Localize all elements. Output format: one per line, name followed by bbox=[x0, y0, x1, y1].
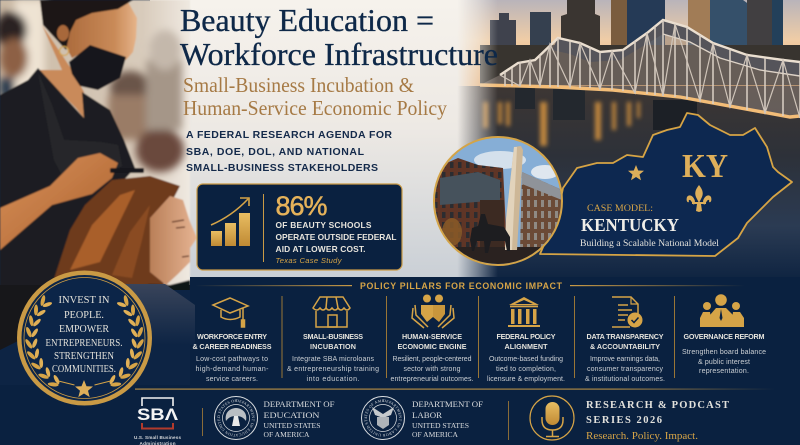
pillar text: licensure & employment. bbox=[487, 376, 565, 383]
seal: Department of Education: DEPARTMENT OF EDUCATION UNITED STATES OF AMERICA bbox=[217, 399, 255, 437]
title bbox=[180, 2, 498, 72]
pillar dividers bbox=[282, 296, 675, 378]
pillar text: ALIGNMENT bbox=[504, 342, 548, 351]
federal research agenda text: SMALL-BUSINESS STAKEHOLDERS bbox=[186, 162, 378, 174]
text: Department of Labor: UNITED STATES bbox=[412, 422, 469, 430]
stat description: AID AT LOWER COST. bbox=[276, 244, 366, 254]
pillar text: consumer transparency bbox=[587, 366, 664, 373]
pillar text: representation. bbox=[699, 368, 749, 375]
federal research agenda text: SBA, DOE, DOL, AND NATIONAL bbox=[186, 146, 365, 158]
text: Department of Education bbox=[264, 400, 335, 439]
gold water reflections bbox=[483, 102, 640, 146]
text: Department of Labor: DEPARTMENT OF bbox=[412, 400, 484, 409]
pillar text: service careers. bbox=[206, 376, 258, 383]
pillar text bbox=[585, 332, 665, 383]
pillar text: Outcome-based funding bbox=[489, 356, 563, 363]
federal research agenda text bbox=[186, 129, 392, 174]
cape fade into panel bbox=[125, 284, 195, 345]
stylist face bbox=[62, 2, 137, 60]
stylist ear and earring bbox=[57, 25, 69, 41]
pillar: data transparency bbox=[585, 297, 665, 383]
pillar text: Strengthen board balance bbox=[682, 349, 766, 356]
icon: rising bar chart with arrow bbox=[211, 198, 250, 246]
photo: city skyline and bridge over river bbox=[440, 0, 800, 286]
pillar text: & CAREER READINESS bbox=[192, 342, 272, 351]
pillar text: Improve earnings data, bbox=[590, 356, 660, 363]
text: Department of Education: DEPARTMENT OF bbox=[264, 400, 335, 409]
client face bbox=[150, 196, 197, 285]
pillar text: INCUBATION bbox=[310, 342, 356, 351]
bottom navy panel bbox=[0, 277, 800, 445]
divider after SBA bbox=[202, 408, 203, 436]
comb bbox=[110, 168, 144, 173]
text: Department of Education: UNITED STATES bbox=[264, 422, 321, 430]
pillar text: Resilient, people-centered bbox=[392, 356, 472, 363]
icon: storefront bbox=[313, 297, 350, 327]
sky bbox=[440, 0, 800, 90]
seal text: STRENGTHEN bbox=[54, 351, 114, 362]
stylist arm and hand bbox=[0, 153, 118, 250]
pillar: small-business incubation bbox=[287, 297, 379, 383]
pillar text bbox=[487, 332, 565, 383]
river water bbox=[460, 86, 800, 272]
pillar text bbox=[682, 332, 766, 375]
seal: Department of Education bbox=[214, 396, 258, 440]
text: Department of Education: EDUCATION bbox=[264, 411, 320, 420]
seal star bbox=[75, 380, 93, 397]
icon: star bbox=[628, 165, 644, 180]
circular photo: Louisville building with bat and horse statue bbox=[434, 137, 565, 267]
text: research and podcast series: RESEARCH & PODCAST bbox=[586, 400, 729, 411]
pillar text: high-demand human- bbox=[196, 366, 269, 373]
client cape bbox=[148, 279, 190, 290]
stat description: OF BEAUTY SCHOOLS bbox=[276, 220, 372, 230]
pillar text: into education. bbox=[306, 376, 360, 383]
logo: SBA bbox=[134, 398, 181, 445]
KY letters: KY bbox=[682, 148, 728, 185]
divider before podcast bbox=[508, 401, 509, 440]
client facial features bbox=[172, 220, 189, 257]
pillar text: GOVERNANCE REFORM bbox=[684, 332, 764, 341]
icon: fleur-de-lis bbox=[687, 185, 711, 212]
pillar text: & ACCOUNTABILITY bbox=[590, 342, 660, 351]
pillar text: & public interest bbox=[698, 359, 750, 366]
pillar text: entrepreneurial outcomes. bbox=[390, 376, 474, 383]
seal text bbox=[46, 295, 122, 375]
seal text: COMMUNITIES. bbox=[52, 364, 116, 375]
pillar text: HUMAN-SERVICE bbox=[402, 332, 462, 341]
face mask bbox=[69, 45, 126, 90]
seal text: EMPOWER bbox=[59, 324, 109, 335]
seal text: PEOPLE. bbox=[64, 310, 104, 321]
pillar text: tied to completion, bbox=[496, 366, 556, 373]
seal text: ENTREPRENEURS. bbox=[46, 338, 122, 349]
text: Department of Education: OF AMERICA bbox=[264, 431, 310, 439]
text: research and podcast series bbox=[586, 400, 729, 442]
stylist black shirt and apron bbox=[0, 68, 135, 290]
stat number: 86% bbox=[276, 191, 328, 221]
heading: policy pillars: POLICY PILLARS FOR ECONOMIC IMPACT bbox=[360, 281, 563, 291]
Kentucky name: KENTUCKY bbox=[581, 215, 679, 235]
pillar: federal policy alignment bbox=[487, 297, 565, 383]
pillar text: ECONOMIC ENGINE bbox=[398, 342, 467, 351]
pillar text bbox=[287, 332, 379, 383]
icon: people in cupped hands bbox=[412, 294, 454, 328]
case model label: CASE MODEL: bbox=[587, 204, 653, 214]
stylist neck and skin bbox=[38, 25, 84, 118]
photo: salon stylist and client bbox=[0, 0, 197, 300]
pillar text: Low-cost pathways to bbox=[196, 356, 268, 363]
text: Department of Labor: OF AMERICA bbox=[412, 431, 458, 439]
pillar text: SMALL-BUSINESS bbox=[303, 332, 363, 341]
text: research and podcast series: Research. Policy. Impact. bbox=[586, 431, 698, 442]
logo: SBA: SBΛ bbox=[137, 406, 178, 424]
title: Workforce Infrastructure bbox=[180, 36, 498, 72]
pillar: governance reform bbox=[682, 294, 766, 375]
subtitle: Human-Service Economic Policy bbox=[183, 96, 447, 120]
text: Department of Labor: LABOR bbox=[412, 411, 443, 420]
seal: invest in people bbox=[17, 270, 152, 406]
subtitle: Small-Business Incubation & bbox=[183, 73, 414, 97]
icon: three leaders bbox=[700, 294, 744, 327]
pillar: workforce entry bbox=[192, 298, 272, 383]
pillar: human-service economic engine bbox=[390, 294, 474, 383]
blurred background people bbox=[0, 0, 184, 172]
case model tagline: Building a Scalable National Model bbox=[580, 238, 720, 248]
icon: document with check bbox=[612, 297, 642, 328]
seal: Department of Labor: DEPARTMENT OF LABOR UNITED STATES OF AMERICA bbox=[364, 399, 402, 436]
Kentucky state shape bbox=[540, 113, 792, 256]
subtitle bbox=[183, 73, 447, 120]
seal: Department of Labor bbox=[361, 396, 405, 440]
text: research and podcast series: SERIES 2026 bbox=[586, 415, 662, 426]
client hair bbox=[52, 176, 180, 290]
laurel wreath bbox=[24, 293, 145, 391]
federal research agenda text: A FEDERAL RESEARCH AGENDA FOR bbox=[186, 129, 392, 141]
pillar text: sector with strong bbox=[404, 366, 461, 373]
stat source: Texas Case Study bbox=[276, 256, 343, 265]
footer divider line bbox=[135, 388, 775, 390]
stat box: 86% bbox=[197, 184, 402, 270]
skyline buildings bbox=[480, 0, 800, 85]
salon background bbox=[0, 0, 190, 290]
pillar text bbox=[192, 332, 272, 383]
text: Department of Labor bbox=[412, 400, 484, 439]
pillar text: DATA TRANSPARENCY bbox=[586, 332, 664, 341]
icon: government building bbox=[508, 297, 540, 327]
pillar text: & institutional outcomes. bbox=[585, 376, 665, 383]
pillar text: Integrate SBA microloans bbox=[292, 356, 374, 363]
bridge piers bbox=[515, 86, 697, 130]
SBA caption: U.S. Small Business bbox=[134, 435, 181, 440]
title: Beauty Education = bbox=[180, 2, 434, 38]
icon: graduation cap bbox=[213, 298, 248, 327]
pillar text: & entrepreneurship training bbox=[287, 366, 379, 373]
pillar text: WORKFORCE ENTRY bbox=[197, 332, 267, 341]
pillar text bbox=[390, 332, 474, 383]
icon: podcast microphone bbox=[530, 396, 574, 440]
bridge truss bbox=[480, 20, 800, 118]
pillar text: FEDERAL POLICY bbox=[496, 332, 556, 341]
stat description: OPERATE OUTSIDE FEDERAL bbox=[276, 232, 396, 242]
stylist hair bbox=[40, 0, 133, 50]
stat description bbox=[276, 220, 396, 254]
seal text: INVEST IN bbox=[58, 295, 110, 306]
cream title background fading into city bbox=[150, 0, 496, 285]
